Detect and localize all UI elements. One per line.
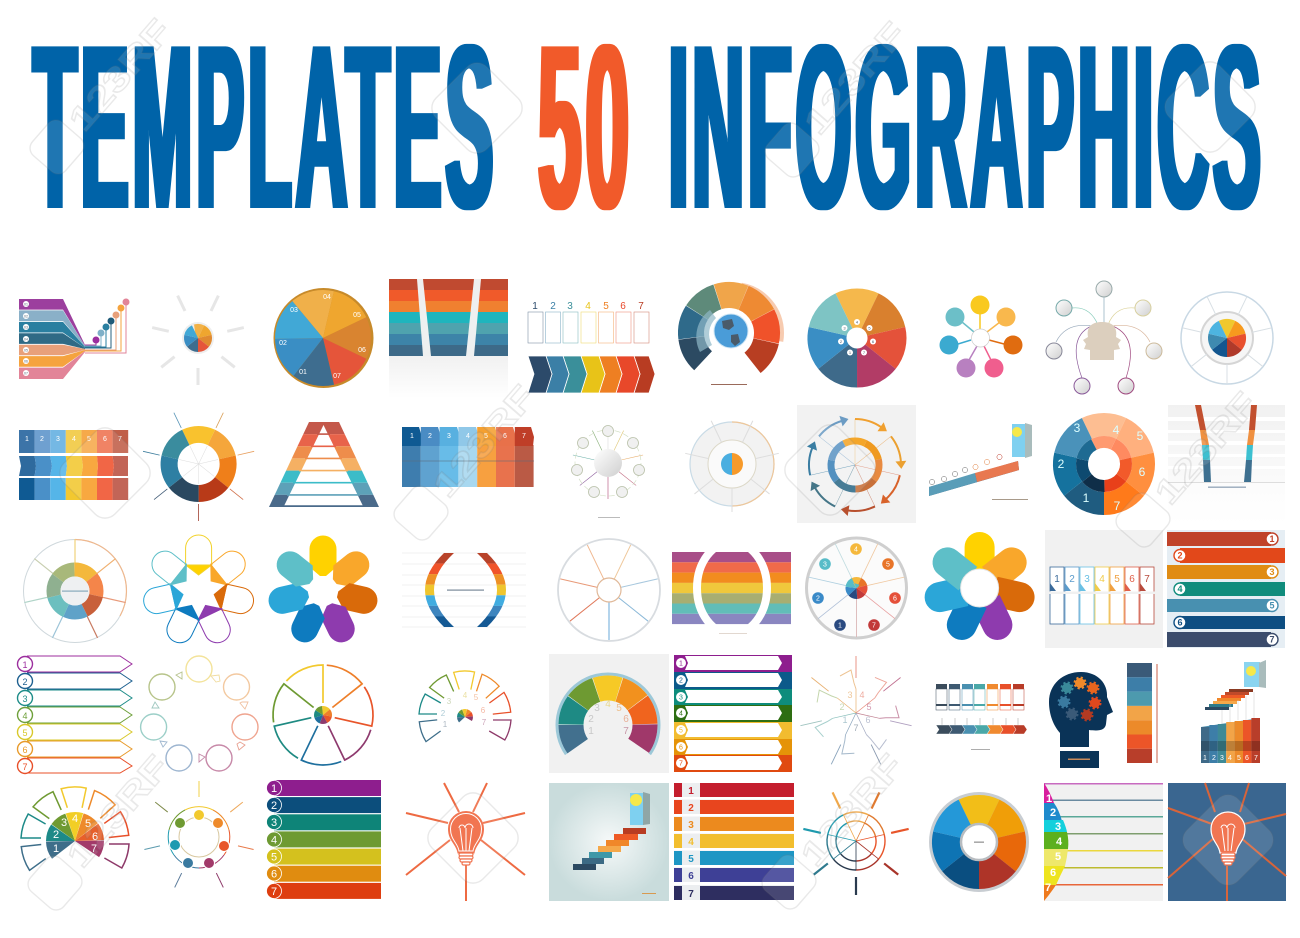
tile 15: outline circle network bbox=[572, 426, 644, 518]
tile 14: wavy folded columns: 6 bbox=[503, 433, 507, 440]
tile 40: stairs above color blocks and door bbox=[1201, 660, 1266, 763]
tile 36: colored rows with white arrows: 2 bbox=[679, 678, 683, 684]
tile 34: half ring outlines with numbers: 6 bbox=[481, 706, 486, 715]
tile 34: half ring outlines with numbers: 4 bbox=[463, 691, 468, 700]
tile 45: stair steps on pale teal panel bbox=[549, 783, 669, 901]
tile 26: rainbow bands with white ellipse ring bbox=[672, 542, 791, 634]
tile 28: large flower bbox=[922, 532, 1038, 645]
tile 5: numbered columns above chevrons: 2 bbox=[550, 301, 556, 312]
tile 40: stairs above color blocks and door: 1 bbox=[1203, 755, 1207, 762]
tile 35: half ring gauge on grey panel: 1 bbox=[588, 726, 594, 737]
tile 14: wavy folded columns: 7 bbox=[522, 433, 526, 440]
tile 44: light bulb with seven rays bbox=[406, 783, 525, 901]
watermark stamps: 123RF bbox=[794, 747, 911, 874]
tile 34: half ring outlines with numbers bbox=[414, 666, 516, 742]
tile 31: outlined arrow rows with numbered circles: 6 bbox=[22, 745, 28, 755]
tile 37: pale outlined wedges with rays: 6 bbox=[865, 715, 871, 725]
tile 37: pale outlined wedges with rays: 4 bbox=[859, 690, 865, 700]
tile 41: fan pie with outlined arcs: 5 bbox=[85, 818, 91, 830]
tile 5: numbered columns above chevrons: 4 bbox=[585, 301, 591, 312]
tile 7: pie with center hole bbox=[817, 298, 897, 378]
tile 27: clock wheel with numbered dots: 1 bbox=[838, 622, 842, 630]
tile 11: seven columns in three rows: 7 bbox=[118, 436, 122, 443]
tile 30: bands with alternating number badges: 5 bbox=[1269, 600, 1275, 610]
tile 33: outlined wedges around mini pie bbox=[261, 655, 380, 776]
tile 7: pie with center hole: 7 bbox=[863, 350, 866, 355]
tile 30: bands with alternating number badges: 2 bbox=[1177, 550, 1183, 560]
tile 10: ring wheel with center pie bbox=[1181, 292, 1273, 384]
tile 17: arrow cycle on grey panel bbox=[797, 405, 916, 523]
tile 31: outlined arrow rows with numbered circles: 7 bbox=[22, 762, 28, 772]
tile 34: half ring outlines with numbers: 5 bbox=[474, 693, 479, 702]
tile 40: stairs above color blocks and door: 7 bbox=[1254, 755, 1258, 762]
tile 35: half ring gauge on grey panel: 7 bbox=[623, 726, 629, 737]
tile 5: numbered columns above chevrons: 5 bbox=[603, 301, 609, 312]
tile 50: light bulb on blue panel bbox=[1168, 783, 1286, 901]
tile 1: funnel layers with lollipop dots: 06 bbox=[24, 359, 28, 363]
tile 27: clock wheel with numbered dots: 2 bbox=[816, 596, 820, 602]
icon: light bulb bbox=[1211, 812, 1245, 865]
tile 27: clock wheel with numbered dots: 3 bbox=[823, 562, 827, 568]
tile 22: outlined petals bbox=[141, 535, 256, 647]
tile 43: solid rows with numbered circles bbox=[266, 780, 381, 899]
tile 5: numbered columns above chevrons: 6 bbox=[620, 301, 626, 312]
tile 29: cards on grey panel: 6 bbox=[1129, 574, 1135, 585]
tile 34: half ring outlines with numbers: 2 bbox=[441, 709, 446, 718]
tile 14: wavy folded columns: 3 bbox=[447, 433, 451, 440]
tile 35: half ring gauge on grey panel: 6 bbox=[623, 714, 629, 725]
tile 31: outlined arrow rows with numbered circles: 1 bbox=[22, 660, 28, 670]
icon: globe bbox=[714, 314, 748, 348]
tile 5: numbered columns above chevrons: 7 bbox=[638, 301, 644, 312]
tile 46: rows with stub and number column: 6 bbox=[688, 871, 694, 882]
tile 37: pale outlined wedges with rays: 7 bbox=[853, 723, 859, 733]
tile 41: fan pie with outlined arcs: 2 bbox=[53, 829, 59, 841]
tile 37: pale outlined wedges with rays: 3 bbox=[847, 690, 853, 700]
tile 30: bands with alternating number badges: 6 bbox=[1177, 618, 1183, 628]
tile 1: funnel layers with lollipop dots: 03 bbox=[24, 325, 28, 329]
tile 14: wavy folded columns: 2 bbox=[428, 433, 432, 440]
tile 11: seven columns in three rows: 1 bbox=[25, 436, 29, 443]
tile 35: half ring gauge on grey panel: 3 bbox=[594, 703, 600, 714]
tile 29: cards on grey panel: 4 bbox=[1099, 574, 1105, 585]
tile 36: colored rows with white arrows: 4 bbox=[679, 710, 683, 718]
tile 14: wavy folded columns: 1 bbox=[410, 433, 414, 440]
title: 50 bbox=[538, 0, 633, 258]
tile 11: seven columns in three rows: 3 bbox=[56, 436, 60, 443]
tile 46: rows with stub and number column: 2 bbox=[688, 803, 694, 814]
tile 34: half ring outlines with numbers: 3 bbox=[447, 697, 452, 706]
tile 35: half ring gauge on grey panel: 4 bbox=[605, 699, 611, 710]
tile 29: cards on grey panel: 3 bbox=[1084, 574, 1090, 585]
tile 31: outlined arrow rows with numbered circles: 4 bbox=[22, 711, 28, 721]
tile 1: funnel layers with lollipop dots: 04 bbox=[24, 337, 28, 341]
tile 49: arc tabs with colored lines: 4 bbox=[1056, 836, 1063, 848]
tile 27: clock wheel with numbered dots bbox=[806, 538, 906, 638]
watermark stamps: 123RF bbox=[60, 748, 177, 875]
tile 49: arc tabs with colored lines bbox=[1044, 783, 1163, 901]
tile 7: pie with center hole: 2 bbox=[840, 339, 843, 344]
tile 5: numbered columns above chevrons bbox=[528, 301, 655, 393]
tile 40: stairs above color blocks and door: 6 bbox=[1245, 755, 1249, 762]
tile 36: colored rows with white arrows: 7 bbox=[679, 760, 683, 768]
tile 41: fan pie with outlined arcs bbox=[15, 781, 135, 870]
tile 19: large two-level donut: 1 bbox=[1083, 491, 1090, 505]
tile 36: colored rows with white arrows: 3 bbox=[679, 694, 683, 702]
tile 13: trapezoid pyramid bbox=[269, 422, 379, 507]
tile 43: solid rows with numbered circles: 1 bbox=[271, 783, 277, 795]
tile 19: large two-level donut: 7 bbox=[1114, 499, 1121, 513]
tile 14: wavy folded columns bbox=[402, 427, 534, 487]
tile 31: outlined arrow rows with numbered circles: 3 bbox=[22, 694, 28, 704]
tile 11: seven columns in three rows bbox=[19, 430, 128, 500]
tile 27: clock wheel with numbered dots: 6 bbox=[893, 596, 897, 602]
tile 14: wavy folded columns: 5 bbox=[484, 433, 488, 440]
tile 46: rows with stub and number column: 5 bbox=[688, 854, 694, 865]
tile 3: large 3D pie: 06 bbox=[358, 347, 366, 354]
tile 43: solid rows with numbered circles: 4 bbox=[271, 834, 277, 846]
tile 19: large two-level donut bbox=[1051, 411, 1157, 517]
tile 41: fan pie with outlined arcs: 1 bbox=[53, 843, 59, 855]
tile 34: half ring outlines with numbers: 7 bbox=[482, 718, 487, 727]
tile 41: fan pie with outlined arcs: 4 bbox=[72, 813, 78, 825]
icon: twin head silhouette bbox=[1083, 322, 1121, 360]
tile 36: colored rows with white arrows bbox=[674, 655, 792, 772]
tile 30: bands with alternating number badges bbox=[1167, 530, 1285, 648]
tile 48: grey-rimmed donut pie bbox=[929, 792, 1029, 892]
icon: light bulb bbox=[448, 812, 484, 865]
tile 40: stairs above color blocks and door: 4 bbox=[1228, 755, 1232, 762]
watermark stamps: 123RF bbox=[1148, 385, 1265, 512]
tile 1: funnel layers with lollipop dots: 01 bbox=[24, 302, 28, 306]
tile 1: funnel layers with lollipop dots bbox=[19, 298, 130, 379]
tile 46: rows with stub and number column: 1 bbox=[688, 786, 694, 797]
tile 32: ring of outlined circles with small arrows bbox=[141, 656, 258, 771]
tile 25: spoked circle outline bbox=[558, 539, 660, 641]
tile 27: clock wheel with numbered dots: 7 bbox=[872, 622, 876, 630]
tile 41: fan pie with outlined arcs: 3 bbox=[61, 817, 67, 829]
tile 30: bands with alternating number badges: 7 bbox=[1269, 634, 1275, 644]
watermark stamps: 123RF bbox=[797, 15, 914, 142]
tile 14: wavy folded columns: 4 bbox=[466, 433, 470, 440]
tile 30: bands with alternating number badges: 1 bbox=[1269, 534, 1275, 544]
tile 36: colored rows with white arrows: 5 bbox=[679, 728, 683, 734]
tile 40: stairs above color blocks and door: 3 bbox=[1220, 755, 1224, 762]
tile 18: sloped beam toward a door bbox=[929, 423, 1032, 500]
tile 40: stairs above color blocks and door: 2 bbox=[1212, 755, 1216, 762]
tile 2: small pie with pale rays bbox=[152, 296, 244, 385]
tile 3: large 3D pie: 05 bbox=[353, 312, 361, 319]
tile 43: solid rows with numbered circles: 7 bbox=[271, 886, 277, 898]
tile 27: clock wheel with numbered dots: 5 bbox=[886, 562, 890, 568]
tile 7: pie with center hole: 3 bbox=[843, 325, 846, 330]
tile 6: horseshoe ring with globe bbox=[675, 279, 783, 387]
tile 37: pale outlined wedges with rays bbox=[800, 656, 912, 764]
tile 49: arc tabs with colored lines: 5 bbox=[1055, 851, 1061, 863]
tile 29: cards on grey panel: 2 bbox=[1069, 574, 1075, 585]
icon: door with sun bbox=[630, 792, 650, 825]
tile 1: funnel layers with lollipop dots: 02 bbox=[24, 314, 28, 318]
tile 37: pale outlined wedges with rays: 5 bbox=[866, 702, 872, 712]
tile 36: colored rows with white arrows: 6 bbox=[679, 744, 683, 752]
icon: door with sun bbox=[1244, 660, 1266, 688]
tile 3: large 3D pie: 04 bbox=[323, 294, 331, 301]
tile 7: pie with center hole: 1 bbox=[849, 350, 852, 355]
tile 31: outlined arrow rows with numbered circles bbox=[18, 656, 132, 774]
tile 7: pie with center hole: 6 bbox=[872, 339, 875, 344]
tile 43: solid rows with numbered circles: 6 bbox=[271, 868, 277, 880]
tile 19: large two-level donut: 5 bbox=[1137, 429, 1144, 443]
tile 3: large 3D pie bbox=[274, 288, 374, 388]
tile 49: arc tabs with colored lines: 1 bbox=[1046, 793, 1052, 805]
tile 35: half ring gauge on grey panel: 2 bbox=[588, 714, 594, 725]
watermark stamps: 123RF bbox=[62, 12, 179, 139]
tile 36: colored rows with white arrows: 1 bbox=[679, 660, 683, 668]
tile 34: half ring outlines with numbers: 1 bbox=[443, 720, 448, 729]
icon: door with sun bbox=[1012, 423, 1032, 458]
tile 37: pale outlined wedges with rays: 2 bbox=[839, 702, 845, 712]
tile 30: bands with alternating number badges: 4 bbox=[1177, 584, 1183, 594]
tile 16: grey wheel with small center pie bbox=[685, 421, 779, 512]
tile 31: outlined arrow rows with numbered circles: 2 bbox=[22, 677, 28, 687]
tile 1: funnel layers with lollipop dots: 07 bbox=[24, 371, 28, 375]
tile 19: large two-level donut: 2 bbox=[1058, 457, 1065, 471]
tile 43: solid rows with numbered circles: 5 bbox=[271, 852, 277, 864]
tile 4: striped bands with slanted gaps bbox=[389, 279, 508, 398]
tile 31: outlined arrow rows with numbered circles: 5 bbox=[22, 728, 28, 738]
tile 49: arc tabs with colored lines: 3 bbox=[1055, 821, 1061, 833]
tile 46: rows with stub and number column: 7 bbox=[688, 889, 694, 900]
tile 19: large two-level donut: 3 bbox=[1074, 421, 1081, 435]
tile 11: seven columns in three rows: 6 bbox=[103, 436, 107, 443]
tile 35: half ring gauge on grey panel: 5 bbox=[616, 703, 622, 714]
tile 1: funnel layers with lollipop dots: 05 bbox=[24, 348, 28, 352]
tile 29: cards on grey panel: 5 bbox=[1114, 574, 1120, 585]
tile 11: seven columns in three rows: 5 bbox=[87, 436, 91, 443]
tile 5: numbered columns above chevrons: 3 bbox=[567, 301, 573, 312]
watermark stamps: 123RF bbox=[426, 378, 543, 505]
tile 29: cards on grey panel bbox=[1045, 530, 1163, 648]
tile 42: ring of number dots with rays bbox=[144, 781, 254, 887]
tile 49: arc tabs with colored lines: 2 bbox=[1050, 807, 1056, 819]
icon: head silhouette bbox=[1049, 672, 1113, 747]
tile 30: bands with alternating number badges: 3 bbox=[1269, 567, 1275, 577]
tile 27: clock wheel with numbered dots: 4 bbox=[854, 546, 858, 554]
tile 19: large two-level donut: 6 bbox=[1139, 465, 1146, 479]
tile 38: small cards with pins and chevrons bbox=[936, 684, 1027, 750]
tile 39: head with gears and color column bbox=[1049, 663, 1158, 768]
tile 3: large 3D pie: 03 bbox=[290, 307, 298, 314]
tile 49: arc tabs with colored lines: 6 bbox=[1050, 867, 1056, 879]
tile 23: filled petals bbox=[266, 536, 380, 647]
tile 3: large 3D pie: 02 bbox=[279, 340, 287, 347]
tile 9: double head with outlined nodes bbox=[1046, 281, 1162, 394]
tile 29: cards on grey panel: 7 bbox=[1144, 574, 1150, 585]
tile 3: large 3D pie: 07 bbox=[333, 373, 341, 380]
tile 11: seven columns in three rows: 4 bbox=[72, 436, 76, 443]
tile 3: large 3D pie: 01 bbox=[299, 369, 307, 376]
tile 46: rows with stub and number column bbox=[674, 783, 794, 900]
tile 11: seven columns in three rows: 2 bbox=[40, 436, 44, 443]
tile 35: half ring gauge on grey panel bbox=[537, 654, 679, 796]
tile 20: slanted bars over grey stripes bbox=[1168, 405, 1285, 523]
tile 7: pie with center hole: 4 bbox=[856, 319, 859, 324]
tile 19: large two-level donut: 4 bbox=[1113, 423, 1120, 437]
tile 41: fan pie with outlined arcs: 6 bbox=[92, 831, 98, 843]
tile 43: solid rows with numbered circles: 3 bbox=[271, 817, 277, 829]
tile 7: pie with center hole: 5 bbox=[868, 325, 871, 330]
tile 46: rows with stub and number column: 3 bbox=[688, 820, 694, 831]
tile 24: parenthesis bands with faint lines bbox=[400, 553, 530, 627]
tile 41: fan pie with outlined arcs: 7 bbox=[91, 843, 97, 855]
tile 21: wheel with arrow ring bbox=[24, 539, 126, 642]
tile 29: cards on grey panel: 1 bbox=[1054, 574, 1060, 585]
tile 43: solid rows with numbered circles: 2 bbox=[271, 800, 277, 812]
tile 8: seven round nodes around hub bbox=[940, 296, 1022, 378]
tile 46: rows with stub and number column: 4 bbox=[688, 837, 694, 848]
tile 37: pale outlined wedges with rays: 1 bbox=[842, 715, 848, 725]
tile 12: donut with thin rays bbox=[143, 413, 254, 521]
tile 49: arc tabs with colored lines: 7 bbox=[1045, 882, 1051, 894]
tile 40: stairs above color blocks and door: 5 bbox=[1237, 755, 1241, 762]
tile 5: numbered columns above chevrons: 1 bbox=[532, 301, 538, 312]
tile 47: double ring wheel with thick rays bbox=[803, 792, 909, 895]
